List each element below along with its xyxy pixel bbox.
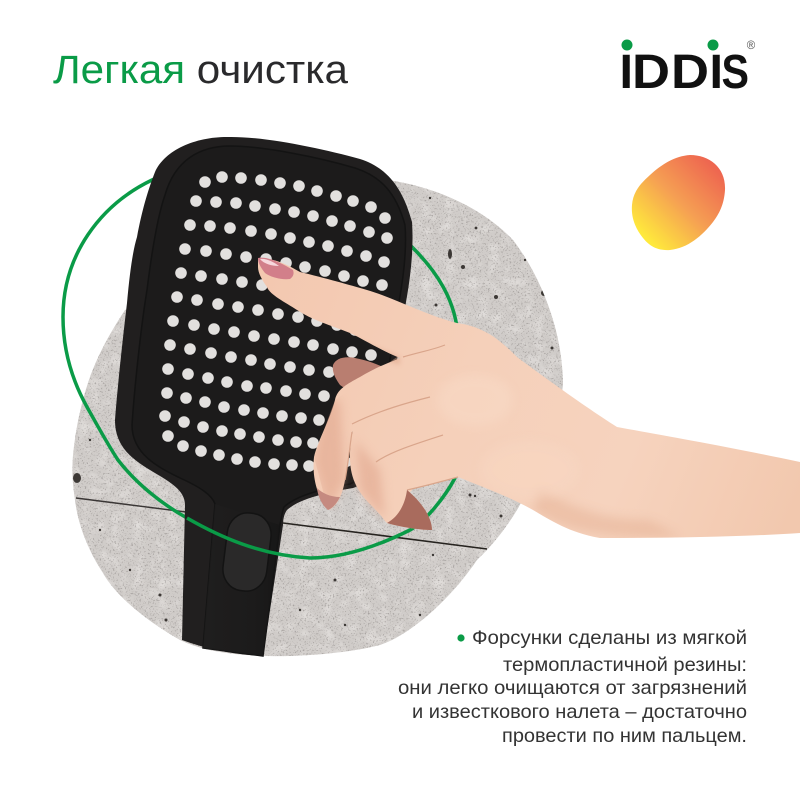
description text: провести по ним пальцем. <box>502 725 747 747</box>
logo: IDDIS: ® <box>747 40 756 52</box>
logo: IDDIS: S <box>722 46 749 99</box>
concrete dark speckles <box>73 197 554 626</box>
description text: термопластичной резины: <box>503 654 747 676</box>
green ring: right arc behind hand <box>413 248 462 478</box>
shower head <box>115 137 413 656</box>
hand shading <box>265 300 680 537</box>
logo: IDDIS: I <box>710 46 723 99</box>
green ring: front arc over handle <box>187 478 455 558</box>
gradient accent blob <box>632 155 725 250</box>
third finger <box>350 395 440 520</box>
little finger nail <box>387 490 432 530</box>
head and handle body <box>115 137 413 656</box>
title: Легкая очистка <box>53 48 349 92</box>
description text: они легко очищаются от загрязнений <box>398 677 747 699</box>
description text: Форсунки сделаны из мягкой <box>472 627 747 649</box>
head face plate <box>132 146 406 656</box>
second finger nail <box>317 488 340 510</box>
logo: IDDIS <box>620 40 756 99</box>
little finger <box>374 430 490 530</box>
index finger nail <box>258 258 294 279</box>
handle lower shading <box>203 504 280 656</box>
finger creases <box>345 345 458 490</box>
green bullet <box>457 634 465 642</box>
mode switch button <box>220 511 274 593</box>
hand <box>258 258 800 538</box>
concrete background shape <box>60 170 570 665</box>
logo: IDDIS: I <box>620 46 633 99</box>
tile seam left <box>76 498 186 512</box>
logo: IDDIS: D <box>632 46 670 99</box>
logo: IDDIS: D <box>671 46 709 99</box>
green ring: back arc <box>63 163 413 540</box>
nozzle dots <box>159 171 393 472</box>
second finger <box>314 345 445 510</box>
description text: и известкового налета – достаточно <box>412 701 747 723</box>
nail highlight <box>260 259 279 266</box>
description text <box>398 627 747 747</box>
thumb nail behind fingers <box>333 357 385 392</box>
tile seam right <box>283 523 487 549</box>
index finger, back of hand and forearm <box>258 259 800 538</box>
